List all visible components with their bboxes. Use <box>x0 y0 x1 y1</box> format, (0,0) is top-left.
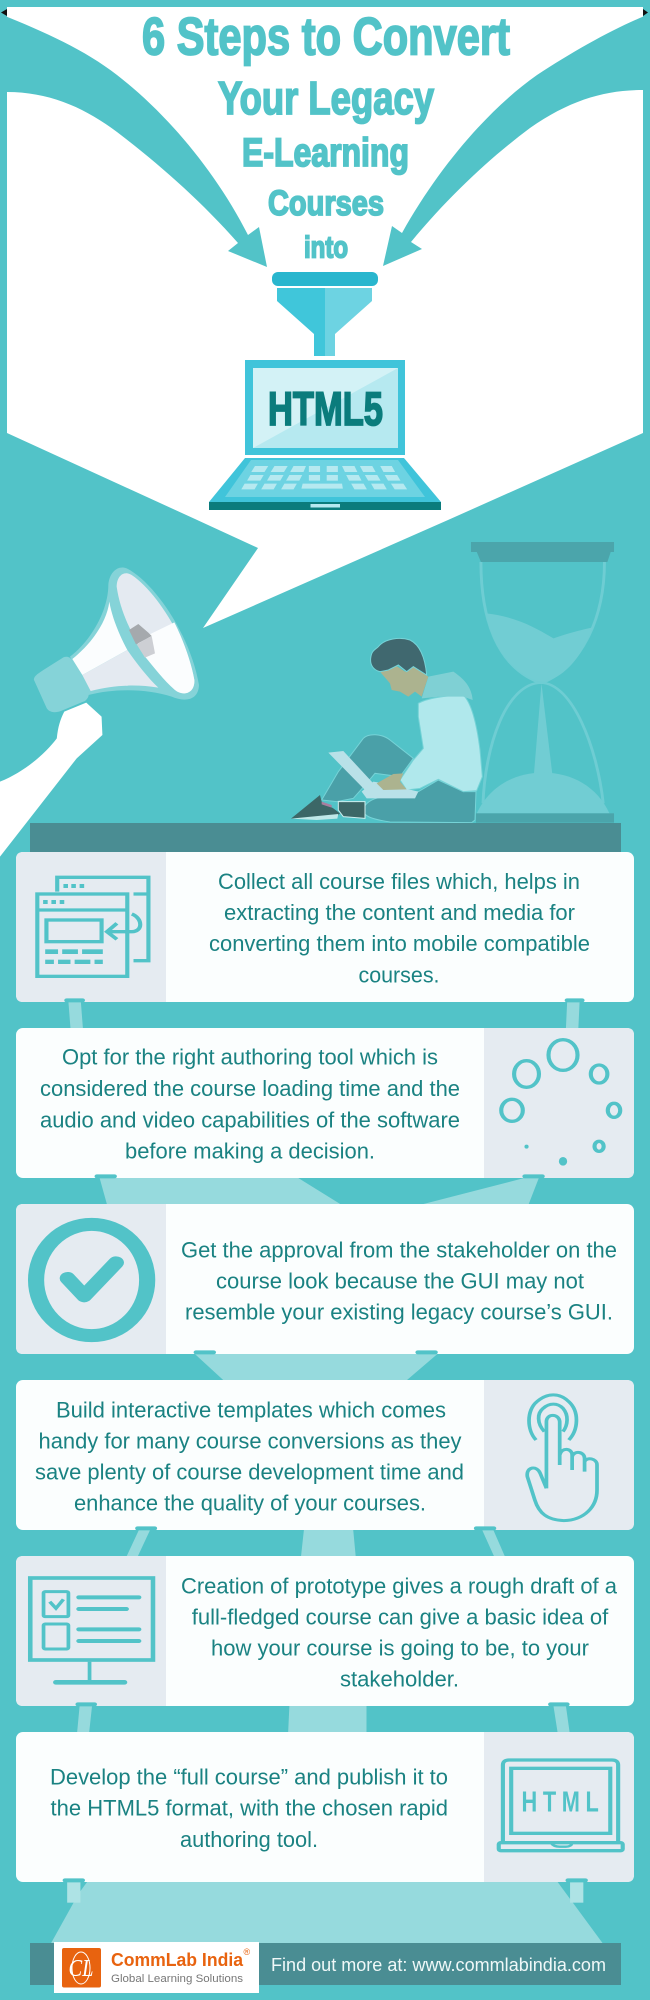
logo: CommLab India: CommLab India <box>111 1950 244 1970</box>
panel: card 4 background <box>16 1380 634 1530</box>
title: into <box>304 229 348 264</box>
logo: CommLab India <box>54 1942 259 1993</box>
icon: laptop with HTML5 <box>209 360 441 510</box>
icon: monitor with checklist <box>30 1578 153 1682</box>
text: step 5 <box>181 1573 618 1692</box>
panel: card 6 background <box>16 1732 634 1882</box>
icon: loading spinner <box>501 1040 620 1166</box>
panel: card 2 icon background <box>484 1028 634 1178</box>
icon: megaphone <box>34 567 199 712</box>
panel: card 6 icon background <box>484 1732 634 1882</box>
icon: tapping hand <box>527 1395 597 1521</box>
panel: card 3 icon background <box>16 1204 166 1354</box>
text: step 4: enhance the quality of your courses. <box>74 1490 426 1516</box>
text: step 1: extracting the content and media for <box>224 900 575 925</box>
title: 6 Steps to Convert <box>142 8 510 67</box>
icon: funnel <box>272 272 378 356</box>
title: Courses <box>268 183 384 223</box>
text: step 2: audio and video capabilities of the software <box>40 1107 460 1132</box>
title: Your Legacy <box>218 72 434 124</box>
text: step 6: the HTML5 format, with the chosen rapid <box>51 1796 448 1820</box>
illustration: person sitting with laptop <box>291 638 482 823</box>
text: step 2: considered the course loading time and the <box>40 1076 460 1101</box>
white speech bubble background <box>1 7 648 628</box>
text: step 6: Develop the “full course” and publish it to <box>50 1764 448 1790</box>
connectors between cards <box>51 1002 603 1944</box>
text: step 6: authoring tool. <box>180 1827 318 1852</box>
text: step 5: stakeholder. <box>340 1666 459 1692</box>
icon: laptop with HTML text: HTML <box>522 1787 599 1818</box>
text: step 3 <box>181 1237 617 1324</box>
panel: card 5 background <box>16 1556 634 1706</box>
logo: CommLab India: Global Learning Solutions <box>111 1973 244 1985</box>
card 3: stakeholder approval <box>16 1204 634 1354</box>
text: step 4: Build interactive templates which comes <box>56 1397 446 1422</box>
panel: card 5 icon background <box>16 1556 166 1706</box>
icon: arm holding megaphone <box>0 703 102 857</box>
connector nubs <box>63 998 588 1882</box>
card 6: full course <box>16 1732 634 1882</box>
text: step 1: courses. <box>358 962 440 988</box>
logo: CommLab India: ® <box>244 1947 250 1957</box>
text: step 6 <box>50 1764 448 1852</box>
text: step 3: course look because the GUI may not <box>216 1268 584 1293</box>
text: step 5: Creation of prototype gives a rough draft of a <box>181 1573 618 1598</box>
panel: card 2 background <box>16 1028 634 1178</box>
text: step 3: Get the approval from the stakeholder on the <box>181 1237 617 1262</box>
panel: card 3 background <box>16 1204 634 1354</box>
text: step 2: before making a decision. <box>125 1138 375 1164</box>
arrow: left curved arrow <box>0 14 267 267</box>
icon: check mark in circle <box>36 1224 147 1336</box>
icon: laptop with HTML text <box>499 1760 623 1851</box>
card 5: prototype <box>16 1556 634 1706</box>
footer link text: Find out more at: www.commlabindia.com <box>271 1955 606 1975</box>
arrow: right curved arrow <box>383 14 650 266</box>
text: step 1 <box>209 869 590 988</box>
logo: CommLab India: CL <box>68 1956 94 1982</box>
icon: browser windows with arrow <box>37 877 148 976</box>
title <box>142 8 510 264</box>
text: step 4: handy for many course conversions as they <box>38 1428 462 1453</box>
text: step 4: save plenty of course development time and <box>35 1459 464 1484</box>
icon: hourglass <box>471 542 614 823</box>
card 1: collect course files <box>16 852 634 1002</box>
panel: card 1 icon background <box>16 852 166 1002</box>
panel: card 1 background <box>16 852 634 1002</box>
icon: laptop with HTML5: HTML5 <box>268 382 383 435</box>
text: step 5: full-fledged course can give a basic idea of <box>192 1604 609 1629</box>
card 2: authoring tool <box>16 1028 634 1178</box>
text: step 2: Opt for the right authoring tool which is <box>62 1045 438 1070</box>
text: step 2 <box>40 1045 460 1164</box>
floor bar <box>30 823 621 853</box>
text: step 1: Collect all course files which, helps in <box>218 869 580 894</box>
text: step 4 <box>35 1397 464 1516</box>
panel: card 4 icon background <box>484 1380 634 1530</box>
title: E-Learning <box>242 131 409 175</box>
card 4: interactive templates <box>16 1380 634 1530</box>
text: step 5: how your course is going to be, to your <box>211 1635 589 1660</box>
text: step 1: converting them into mobile compatible <box>209 931 590 956</box>
footer bar <box>30 1943 621 1985</box>
text: step 3: resemble your existing legacy course’s GUI. <box>185 1300 613 1324</box>
